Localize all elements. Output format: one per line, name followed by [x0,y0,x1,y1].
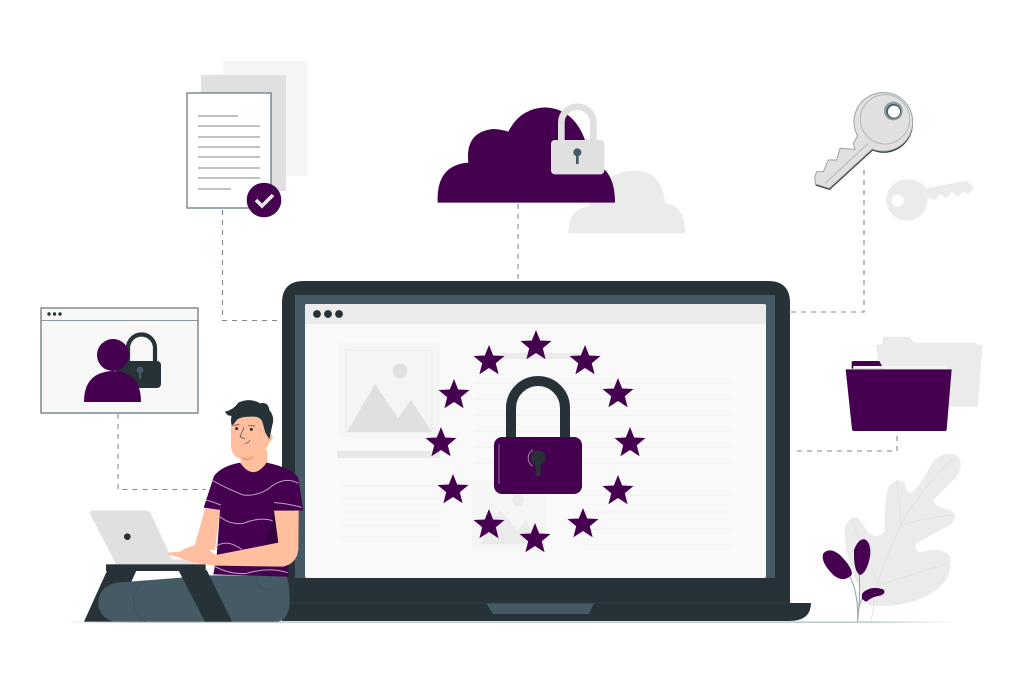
icon: purple cloud with padlock [438,107,615,203]
arms [193,508,220,550]
hair [225,400,273,439]
notebook [90,510,174,564]
ground line [62,622,957,623]
table right leg [178,570,232,622]
shirt [204,463,303,577]
icon: documents with check [187,61,307,217]
table left leg [84,570,137,622]
browser title bar [305,304,766,324]
laptop: large device [282,281,811,621]
icon: purple folder [846,361,952,431]
person: man sitting with notebook [84,400,303,622]
face details [235,427,238,430]
icon: gray key [886,179,974,221]
stars ring [426,330,646,552]
icon: small padlock [116,334,161,388]
panel: user login window [41,308,198,413]
icon: gray back folder [876,337,983,407]
screen base notch [486,603,594,614]
padlock [494,381,582,494]
page content: text lines [337,353,730,550]
pants [98,575,290,622]
plant: purple sprout [823,539,884,622]
page content: ghost image [339,343,440,438]
icon: gray cloud [568,171,685,233]
icon: user silhouette [84,339,141,402]
dashed connectors [118,170,897,490]
plant: large gray leaf [845,454,961,622]
neck [241,450,267,478]
table top [106,564,206,571]
icon: large key [815,92,913,190]
head [265,433,273,441]
